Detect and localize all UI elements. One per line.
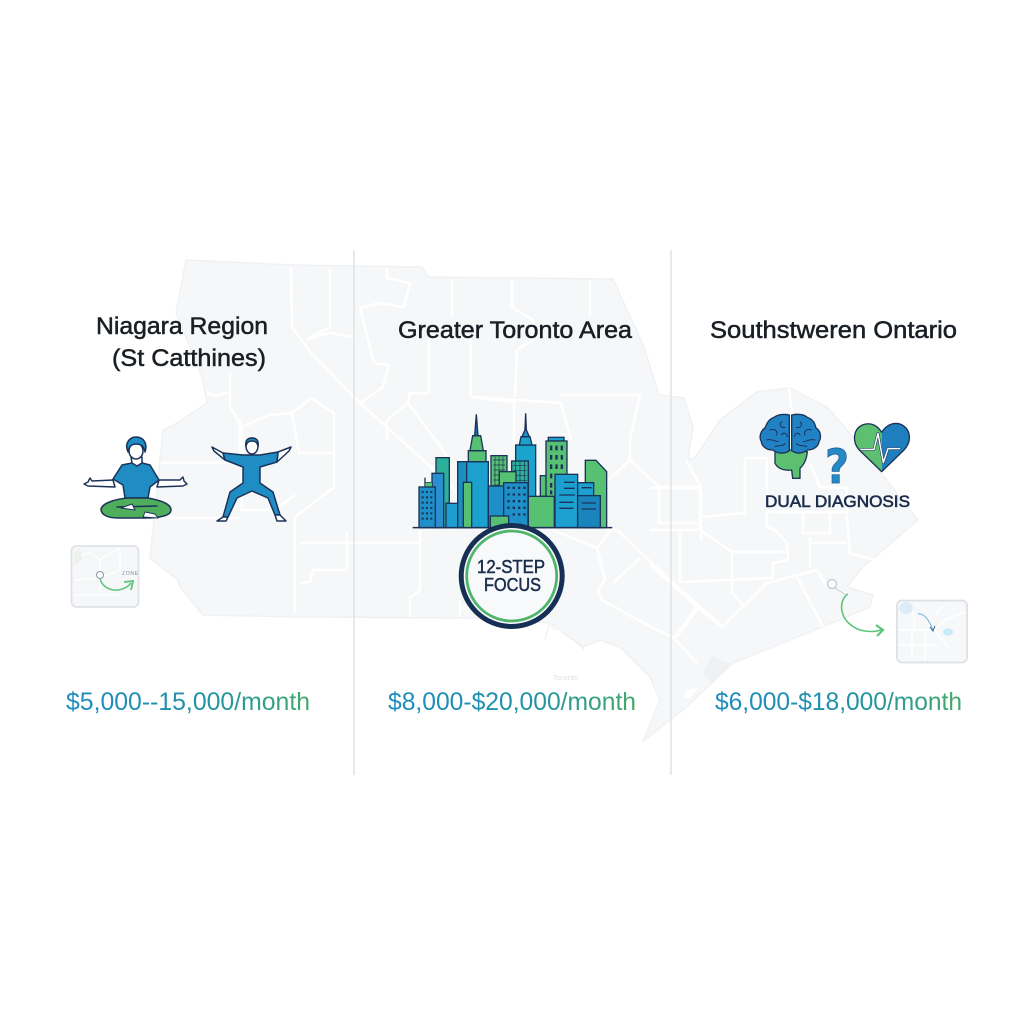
icon: heart with pulse [855, 423, 909, 472]
icon: seated meditation figure [84, 437, 187, 518]
icon: standing stretch figure [212, 438, 291, 521]
heading: Niagara Region: Niagara Region [96, 313, 268, 340]
panel: Niagara Region [66, 313, 310, 716]
inset map [897, 600, 967, 662]
icon: question mark: ? [825, 440, 849, 495]
icon: brain [760, 414, 820, 478]
heading: Southstweren Ontario: Southstweren Ontario [710, 317, 957, 344]
label: dual diagnosis: DUAL DIAGNOSIS [765, 492, 910, 511]
badge: 12-step focus: FOCUS [484, 575, 541, 595]
heading: Greater Toronto Area: Greater Toronto Area [398, 317, 633, 344]
background map of southern Ontario: Toronto [553, 673, 578, 682]
arrow to inset [842, 594, 883, 636]
inset map with arrow [72, 546, 139, 607]
location pin [828, 580, 846, 595]
icon: city skyline [413, 413, 612, 528]
price: Niagara: $5,000--15,000/month [66, 688, 310, 716]
inset map with arrow: ZONE [122, 571, 139, 577]
price: Toronto: $8,000-$20,000/month [388, 688, 636, 716]
badge: 12-step focus: 12-STEP [477, 557, 545, 577]
heading: St Catthines: (St Catthines) [112, 345, 266, 372]
divider left [353, 250, 355, 775]
badge: 12-step focus [461, 526, 562, 626]
divider right [670, 250, 672, 775]
background map of southern Ontario [150, 260, 918, 741]
panel: Southwestern Ontario [710, 317, 967, 716]
panel: Greater Toronto Area [388, 317, 636, 716]
price: Southwestern: $6,000-$18,000/month [715, 688, 962, 716]
